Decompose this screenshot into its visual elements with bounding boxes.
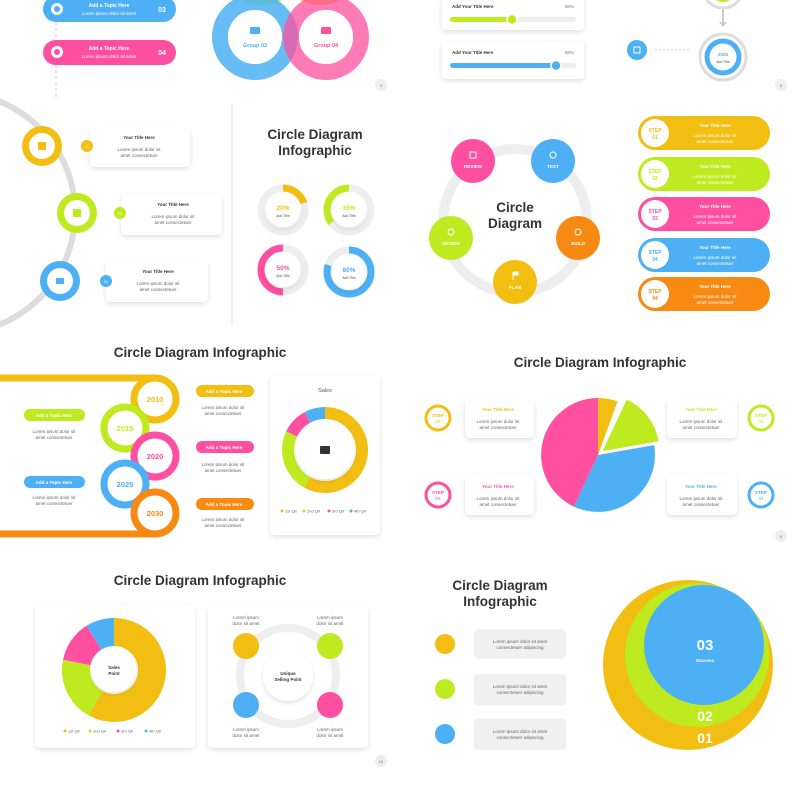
panel: snake timeline: Add a Topic Here bbox=[36, 480, 73, 485]
step 03: Your Title Here bbox=[142, 269, 174, 274]
panel: sales donut: 1st Qtr bbox=[285, 508, 298, 514]
panel: cycle diagram: REVIEW bbox=[464, 164, 483, 169]
panel: snake timeline bbox=[0, 345, 287, 534]
panel: percent donuts bbox=[261, 127, 371, 294]
panel: sales point donut: 3rd Qtr bbox=[121, 728, 134, 734]
panel: nested circles: Circle Diagram bbox=[452, 578, 548, 593]
panel: step pills: Your Title Here bbox=[699, 123, 731, 128]
panel: pie chart steps: Your Title Here bbox=[482, 407, 514, 412]
badge 4 bbox=[375, 79, 387, 91]
panel: arc steps bbox=[0, 93, 222, 333]
panel: progress bars: Add Your Title Here bbox=[452, 4, 494, 9]
panel: pie chart steps: Your Title Here bbox=[685, 407, 717, 412]
panel: percent donuts: Add Title bbox=[276, 214, 290, 218]
panel: step pills: Your Title Here bbox=[699, 204, 731, 209]
badge 9 bbox=[775, 530, 787, 542]
badge 10 bbox=[375, 755, 387, 767]
badge 5: 5 bbox=[780, 83, 783, 88]
panel: sales donut: 4th Qtr bbox=[354, 508, 367, 514]
panel: step pills: STEP bbox=[648, 250, 662, 256]
pill 03 bbox=[43, 0, 176, 22]
step 02: Lorem ipsum dolor sit bbox=[151, 214, 195, 219]
panel: percent donuts: 20% bbox=[276, 205, 290, 212]
panel: step pills: Your Title Here bbox=[699, 284, 731, 289]
panel: nested circles: Success bbox=[696, 658, 715, 663]
pill 03: 03 bbox=[158, 7, 166, 14]
panel: sales point donut: 2nd Qtr bbox=[93, 728, 107, 734]
step 02: 02 bbox=[118, 212, 122, 216]
panel: snake timeline: 2015 bbox=[117, 424, 133, 433]
panel: pie chart steps: Your Title Here bbox=[482, 484, 514, 489]
panel: cycle diagram: BUILD bbox=[571, 241, 586, 246]
panel: pie chart steps: STEP bbox=[755, 490, 767, 495]
title: Circle Diagram bbox=[267, 127, 363, 142]
panel: unique selling point: dolor sit amet bbox=[316, 621, 344, 626]
panel: nested circles: consectetuer adipiscing bbox=[496, 735, 544, 740]
timeline circles bbox=[627, 0, 746, 80]
panel: percent donuts: 35% bbox=[342, 205, 356, 212]
step 02 bbox=[57, 193, 222, 235]
pill 03: Add a Topic Here bbox=[89, 3, 130, 9]
pill 04: 04 bbox=[158, 50, 166, 57]
panel: step pills: 04 bbox=[652, 296, 658, 302]
panel: step pills: 03 bbox=[652, 216, 658, 222]
panel: percent donuts: Add Title bbox=[342, 214, 356, 218]
panel: snake timeline: Lorem ipsum dolor sit bbox=[32, 495, 76, 500]
panel: step pills: Lorem ipsum dolor sit bbox=[693, 255, 737, 260]
panel: sales donut bbox=[270, 375, 380, 535]
panel: snake timeline: Add a Topic Here bbox=[206, 389, 243, 394]
panel: snake timeline: Circle Diagram Infographic bbox=[114, 345, 287, 360]
panel: snake timeline: amet consectetuer bbox=[35, 435, 73, 440]
panel: progress bars: Add Your Title Here bbox=[452, 50, 494, 55]
panel: snake timeline: Add a Topic Here bbox=[206, 502, 243, 507]
panel: step pills: Lorem ipsum dolor sit bbox=[693, 174, 737, 179]
panel: pie chart steps: Lorem ipsum dolor sit bbox=[476, 496, 520, 501]
panel: sales donut: Sales bbox=[318, 388, 332, 394]
pill 04: Add a Topic Here bbox=[89, 46, 130, 52]
panel: sales point donut: Sales bbox=[108, 665, 120, 670]
panel: snake timeline: 2020 bbox=[147, 452, 163, 461]
panel: sales point donut: Circle Diagram Infographic bbox=[114, 573, 287, 588]
panel: cycle diagram: TEST bbox=[547, 164, 559, 169]
panel: step pills: Lorem ipsum dolor sit bbox=[693, 214, 737, 219]
step 03 bbox=[40, 260, 208, 302]
panel: step pills: 01 bbox=[652, 135, 658, 141]
panel: sales donut: 2nd Qtr bbox=[307, 508, 321, 514]
step 01: Your Title Here bbox=[123, 135, 155, 140]
panel: percent donuts: Add Title bbox=[342, 276, 356, 280]
panel: snake timeline: Lorem ipsum dolor sit bbox=[201, 462, 245, 467]
step 01: amet consectetuer bbox=[120, 153, 158, 158]
panel: unique selling point: dolor sit amet bbox=[316, 733, 344, 738]
panel: pie chart steps: 04 bbox=[758, 496, 764, 501]
panel: step pills: STEP bbox=[648, 169, 662, 175]
panel: snake timeline: amet consectetuer bbox=[35, 501, 73, 506]
panel: percent donuts: Infographic bbox=[278, 143, 352, 158]
panel: step pills: 04 bbox=[652, 257, 658, 263]
badge 9: 9 bbox=[780, 534, 783, 539]
panel: sales point donut: 4th Qtr bbox=[149, 728, 162, 734]
badge 10: 10 bbox=[379, 759, 384, 764]
panel: pie chart steps: Your Title Here bbox=[685, 484, 717, 489]
panel: snake timeline: 2025 bbox=[117, 480, 133, 489]
panel: pie chart steps: STEP bbox=[432, 413, 444, 418]
panel: pie chart steps: amet consectetuer bbox=[479, 502, 517, 507]
panel: nested circles: Lorem ipsum dolor sit amet bbox=[493, 729, 548, 734]
badge 4: 4 bbox=[380, 83, 383, 88]
step 03: Lorem ipsum dolor sit bbox=[136, 281, 180, 286]
panel: snake timeline: 2010 bbox=[147, 395, 163, 404]
step 02: Your Title Here bbox=[157, 202, 189, 207]
panel: nested circles bbox=[435, 578, 773, 750]
panel: nested circles: 02 bbox=[697, 708, 713, 724]
panel: cycle diagram: DESIGN bbox=[442, 241, 460, 246]
panel: sales point donut: Point bbox=[108, 671, 120, 676]
panel: step pills: amet consectetuer bbox=[696, 220, 734, 225]
venn diagram: Group 03 bbox=[243, 43, 267, 49]
panel: unique selling point: Lorem ipsum bbox=[233, 727, 259, 732]
panel: percent donuts: 50% bbox=[276, 265, 290, 272]
panel: unique selling point: dolor sit amet bbox=[232, 621, 260, 626]
panel: unique selling point: Lorem ipsum bbox=[317, 727, 343, 732]
step 03: 03 bbox=[104, 280, 108, 284]
panel: pie chart steps: amet consectetuer bbox=[479, 425, 517, 430]
step 01: Lorem ipsum dolor sit bbox=[117, 147, 161, 152]
panel: cycle diagram: Circle bbox=[496, 200, 534, 215]
panel: step pills: amet consectetuer bbox=[696, 180, 734, 185]
venn diagram: Group 04 bbox=[314, 43, 339, 49]
panel: step pills: amet consectetuer bbox=[696, 139, 734, 144]
panel: nested circles: Lorem ipsum dolor sit amet bbox=[493, 684, 548, 689]
panel: step pills: Lorem ipsum dolor sit bbox=[693, 294, 737, 299]
panel: percent donuts: Add Title bbox=[276, 274, 290, 278]
pill 04: Lorem ipsum dolor sit amet bbox=[82, 54, 137, 59]
panel: progress bars bbox=[442, 0, 584, 79]
panel: step pills: Your Title Here bbox=[699, 245, 731, 250]
panel: nested circles: consectetuer adipiscing bbox=[496, 690, 544, 695]
badge 5 bbox=[775, 79, 787, 91]
panel: snake timeline: 2030 bbox=[147, 509, 163, 518]
panel: snake timeline: Add a Topic Here bbox=[206, 445, 243, 450]
pill 03: Lorem ipsum dolor sit amet bbox=[82, 11, 137, 16]
panel: step pills: STEP bbox=[648, 128, 662, 134]
tags bbox=[196, 385, 254, 397]
panel: step pills: Your Title Here bbox=[699, 164, 731, 169]
timeline circles: Add Title bbox=[716, 60, 730, 64]
step 01: 01 bbox=[85, 145, 89, 149]
panel: unique selling point: Selling Point bbox=[274, 677, 302, 682]
panel: sales point donut bbox=[35, 573, 368, 748]
panel: snake timeline: Lorem ipsum dolor sit bbox=[201, 405, 245, 410]
panel: pie chart steps: Lorem ipsum dolor sit bbox=[679, 419, 723, 424]
panel: cycle diagram: Diagram bbox=[488, 216, 542, 231]
panel: percent donuts: 80% bbox=[342, 267, 356, 274]
panel: nested circles: consectetuer adipiscing bbox=[496, 645, 544, 650]
panel: progress bars: 80% bbox=[565, 50, 574, 55]
pill 04 bbox=[43, 40, 176, 65]
panel: step pills: STEP bbox=[648, 209, 662, 215]
panel: pie chart steps: amet consectetuer bbox=[682, 425, 720, 430]
step 03: amet consectetuer bbox=[139, 287, 177, 292]
panel: pie chart steps: STEP bbox=[755, 413, 767, 418]
panel: step pills: Lorem ipsum dolor sit bbox=[693, 133, 737, 138]
panel: pie chart steps: Lorem ipsum dolor sit bbox=[679, 496, 723, 501]
panel: pie chart steps: 03 bbox=[435, 496, 441, 501]
panel: topic pills bbox=[43, 0, 176, 100]
panel: sales point donut: 1st Qtr bbox=[68, 728, 81, 734]
panel: nested circles: 01 bbox=[697, 730, 713, 746]
panel: pie chart steps bbox=[426, 355, 773, 515]
panel: pie chart steps: amet consectetuer bbox=[682, 502, 720, 507]
panel: snake timeline: Lorem ipsum dolor sit bbox=[201, 517, 245, 522]
panel: unique selling point: Lorem ipsum bbox=[233, 615, 259, 620]
panel: unique selling point: Lorem ipsum bbox=[317, 615, 343, 620]
panel: pie chart steps: Lorem ipsum dolor sit bbox=[476, 419, 520, 424]
panel: snake timeline: amet consectetuer bbox=[204, 411, 242, 416]
timeline circles: 2025 bbox=[718, 52, 729, 57]
panel: nested circles: Lorem ipsum dolor sit amet bbox=[493, 639, 548, 644]
step 01 bbox=[22, 126, 190, 167]
panel: snake timeline: amet consectetuer bbox=[204, 523, 242, 528]
panel: sales donut: 3rd Qtr bbox=[332, 508, 345, 514]
panel: step pills: 02 bbox=[652, 176, 658, 182]
panel: snake timeline: Add a Topic Here bbox=[36, 413, 73, 418]
panel: step pills: STEP bbox=[648, 289, 662, 295]
panel: pie chart steps: Circle Diagram Infographic bbox=[514, 355, 687, 370]
panel: unique selling point: dolor sit amet bbox=[232, 733, 260, 738]
panel: nested circles: Infographic bbox=[463, 594, 537, 609]
panel: unique selling point bbox=[232, 615, 344, 738]
panel: step pills: amet consectetuer bbox=[696, 300, 734, 305]
venn diagram bbox=[219, 0, 363, 72]
panel: cycle diagram: PLAN bbox=[509, 285, 521, 290]
step 02: amet consectetuer bbox=[154, 220, 192, 225]
panel: step pills bbox=[638, 116, 770, 311]
panel: nested circles: 03 bbox=[697, 637, 713, 654]
panel: snake timeline: amet consectetuer bbox=[204, 468, 242, 473]
panel: cycle diagram bbox=[429, 139, 600, 304]
panel: pie chart steps: 01 bbox=[435, 419, 441, 424]
panel: pie chart steps: 02 bbox=[758, 419, 764, 424]
panel: pie chart steps: STEP bbox=[432, 490, 444, 495]
panel: snake timeline: Lorem ipsum dolor sit bbox=[32, 429, 76, 434]
panel: progress bars: 50% bbox=[565, 4, 574, 9]
panel: step pills: amet consectetuer bbox=[696, 261, 734, 266]
panel: unique selling point: Unique bbox=[280, 671, 296, 676]
